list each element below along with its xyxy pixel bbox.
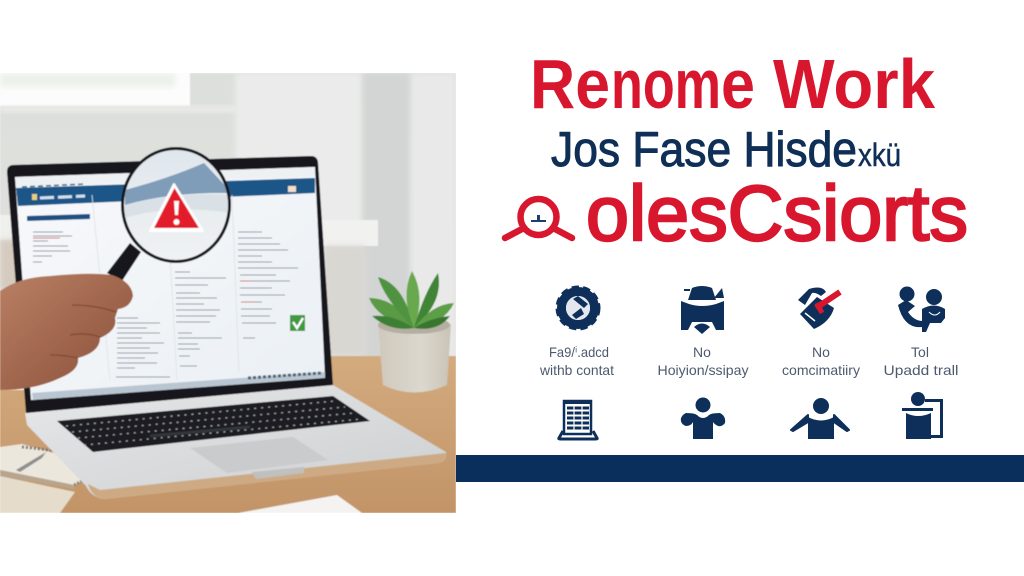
label: column 3: No: [812, 344, 830, 360]
label: column 2: [658, 344, 748, 378]
label: column 3: comcimatiiry: [782, 362, 860, 378]
icon: person at door: [902, 392, 943, 439]
label: column 1: withb contat: [539, 362, 614, 378]
icon: gear with face: [558, 288, 598, 328]
handle: [107, 243, 141, 281]
lens rim: [121, 147, 231, 263]
laptop base: [25, 385, 446, 499]
icon: person arms out: [681, 398, 725, 439]
label: column 1: Fa9/ⁱ.adcd: [549, 344, 609, 360]
label: column 3: [782, 344, 860, 378]
taskbar: [32, 372, 325, 400]
green check badge: [290, 315, 305, 331]
paper on desk: [238, 495, 362, 513]
sidebar header: [27, 214, 90, 221]
navy footer bar: [456, 455, 1024, 482]
keyboard: [57, 396, 370, 452]
screen bezel: [7, 156, 333, 413]
panel: photo of laptop with magnifier: [0, 73, 456, 513]
label: column 4: [884, 344, 958, 378]
laptop: [7, 156, 446, 499]
notch: [252, 467, 304, 479]
icon: red magnifier logo: [505, 199, 572, 238]
icon: pencil and check: [798, 288, 840, 329]
title: line 2: Jos Fase Hisde: [551, 123, 857, 177]
plant in pot: [369, 271, 454, 392]
label: column 4: Upadd trall: [884, 362, 958, 378]
title: line 3: olesCsiorts: [586, 169, 968, 257]
label: column 2: Hoiyion/ssipay: [658, 362, 748, 378]
screen: [15, 167, 325, 400]
icon: desk and person: [681, 286, 724, 334]
label: column 1: [539, 344, 614, 378]
warning triangle: [150, 184, 203, 231]
lens view: [120, 148, 232, 264]
title: line 1: [530, 45, 935, 123]
trackpad: [190, 437, 328, 473]
notebook: [0, 443, 82, 513]
wooden desk: [0, 356, 456, 513]
hand holding magnifier: [0, 274, 133, 390]
title: line 2: xkü: [858, 137, 901, 173]
title: line 1: e: [721, 45, 755, 123]
icon: laptop with table: [559, 400, 597, 439]
magnifying glass with warning sign: [107, 147, 232, 281]
app header: [16, 178, 315, 206]
title: line 1: nom: [611, 45, 721, 123]
icon: two people connected: [898, 286, 945, 332]
label: column 2: No: [693, 344, 711, 360]
columns of text: [92, 195, 239, 380]
label: column 4: Tol: [911, 344, 929, 360]
icon: person arms down: [791, 398, 849, 439]
title: line 1: Work: [773, 45, 935, 123]
background wall and window: [0, 73, 456, 373]
infographic canvas: [0, 58, 1024, 513]
title: line 1: Re: [530, 45, 610, 123]
